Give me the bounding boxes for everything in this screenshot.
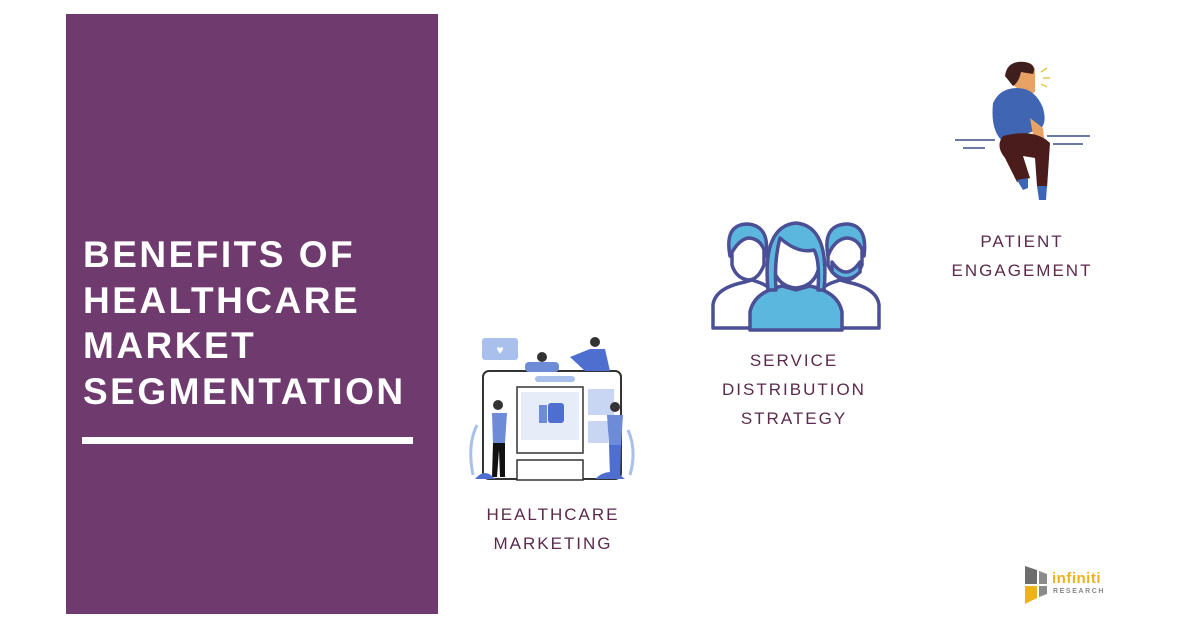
label: service distribution strategy: SERVICE (750, 351, 838, 370)
label: service distribution strategy (722, 351, 866, 428)
label: healthcare marketing: MARKETING (493, 534, 613, 553)
logo: infiniti research (1025, 566, 1105, 604)
logo: infiniti research: RESEARCH (1053, 588, 1105, 595)
label: patient engagement: ENGAGEMENT (952, 261, 1092, 280)
title underline (82, 437, 413, 444)
title: BENEFITS OF (83, 234, 355, 275)
label: patient engagement (952, 232, 1092, 280)
icon: healthcare marketing illustration (469, 337, 635, 481)
label: healthcare marketing: HEALTHCARE (486, 505, 620, 524)
title: SEGMENTATION (83, 370, 406, 412)
icon: healthcare marketing illustration: ♥ (496, 343, 504, 357)
logo: infiniti research: infiniti (1052, 570, 1101, 587)
label: service distribution strategy: STRATEGY (741, 409, 847, 428)
icon: seated patient (955, 62, 1090, 200)
title: MARKET (83, 325, 256, 366)
panel: title background (66, 14, 438, 614)
label: service distribution strategy: DISTRIBUTION (722, 380, 866, 399)
title (83, 234, 406, 412)
label: healthcare marketing (486, 505, 620, 553)
icon: group of people (711, 221, 881, 332)
label: patient engagement: PATIENT (980, 232, 1064, 251)
title: HEALTHCARE (83, 280, 360, 320)
